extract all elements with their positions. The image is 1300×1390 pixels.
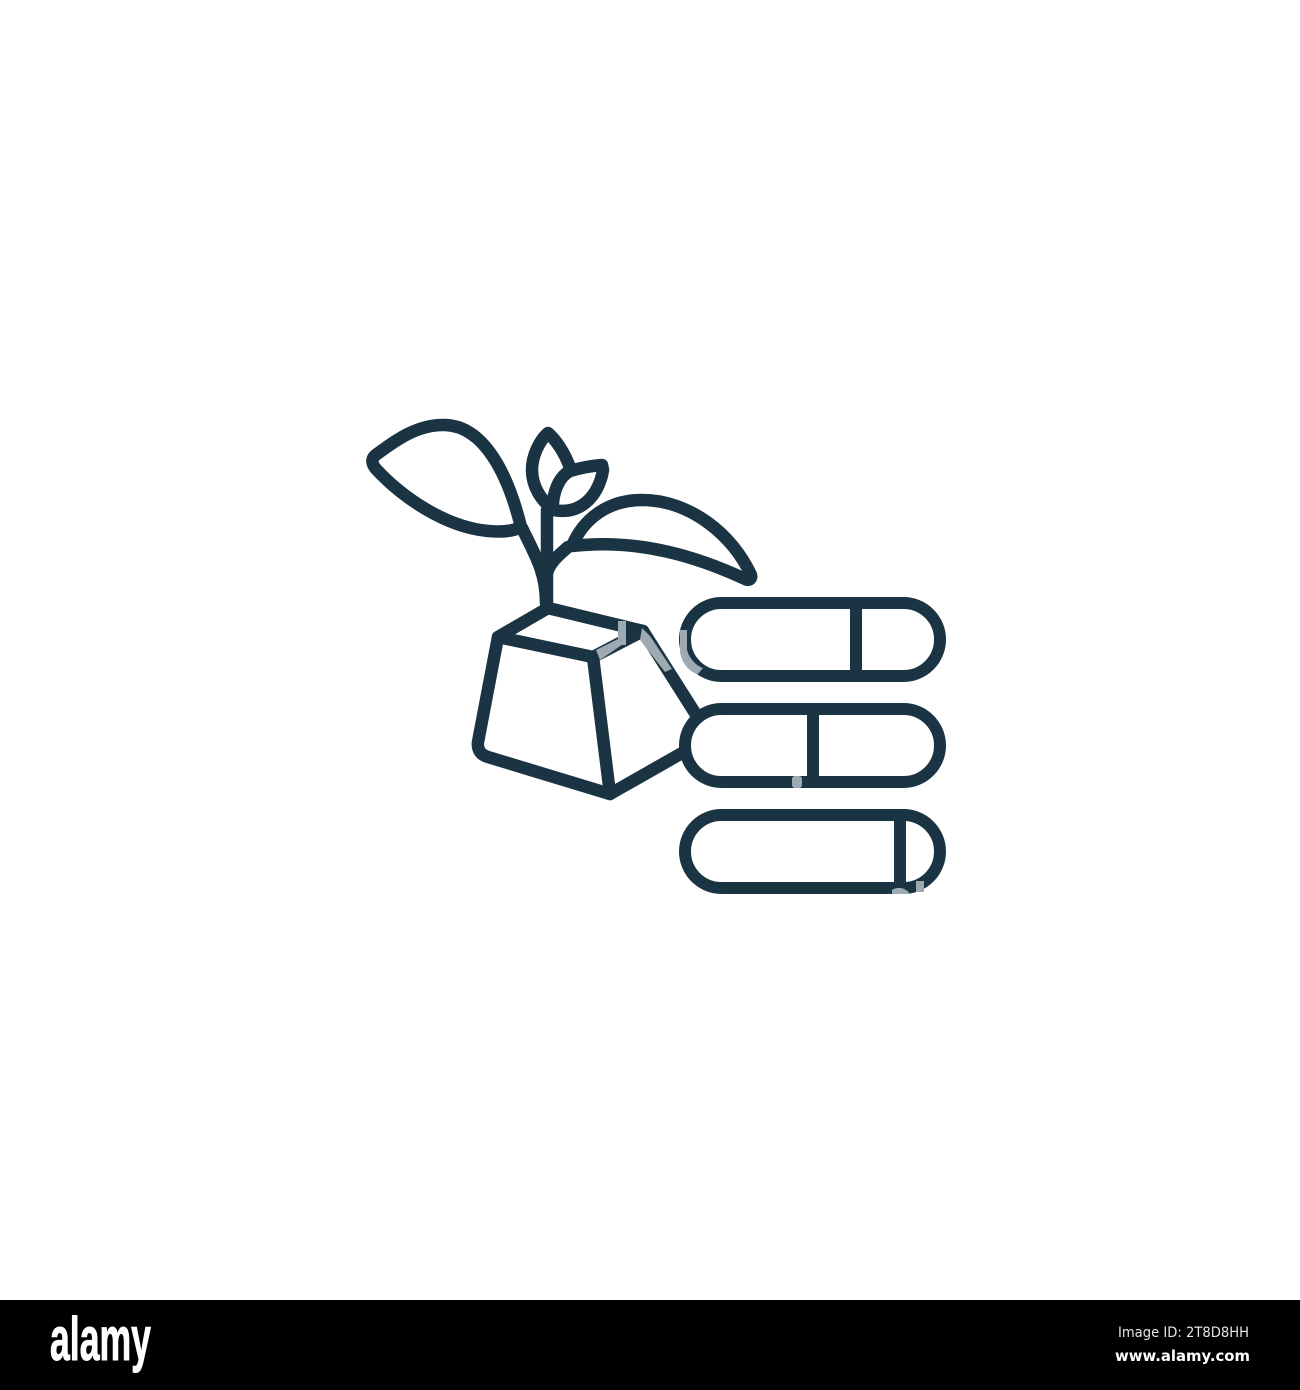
icon: middle capsule — [685, 709, 940, 782]
icon: top bud leaf — [532, 433, 570, 509]
icon: small bud leaf — [553, 465, 603, 511]
icon: right leaf — [572, 500, 751, 580]
icon: plant and capsules — [372, 425, 940, 888]
website url: www.alamy.com — [1115, 1347, 1250, 1365]
icon: large left leaf — [372, 425, 521, 532]
icon: bottom capsule — [685, 815, 940, 888]
footer bar — [0, 1300, 1300, 1390]
icon: top capsule — [685, 603, 940, 676]
logo: alamy: alamy — [50, 1305, 151, 1373]
icon: root cube — [478, 608, 695, 794]
watermark fragments over icon — [596, 621, 924, 894]
image id: Image ID: 2T8D8HH — [1118, 1325, 1249, 1341]
icon: plant stem — [522, 510, 568, 603]
